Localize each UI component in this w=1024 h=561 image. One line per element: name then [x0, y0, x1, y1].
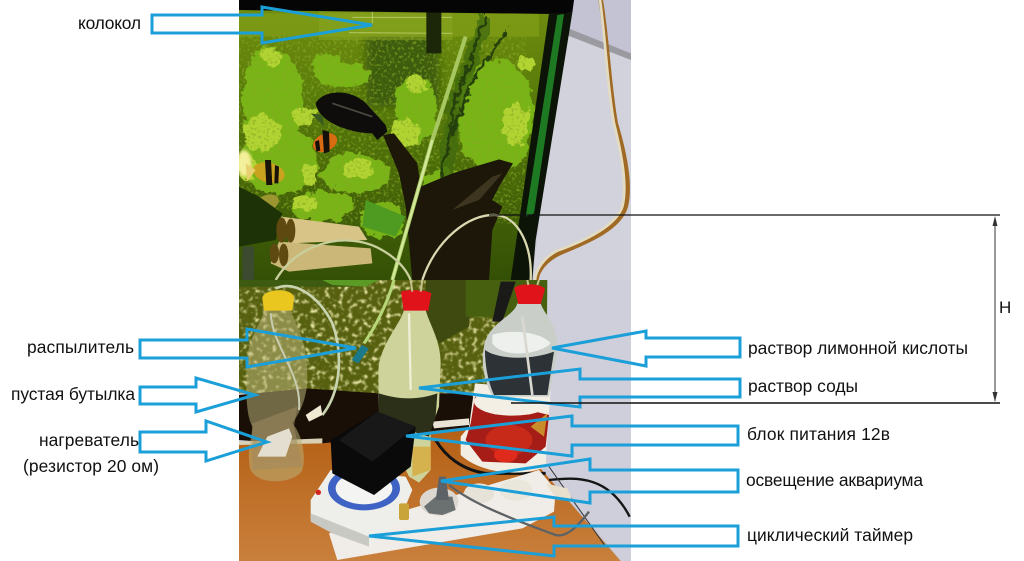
aquarium upper part	[237, 0, 631, 280]
label: нагреватель: нагреватель	[39, 430, 139, 450]
label: резистор: (резистор 20 ом)	[23, 456, 159, 476]
hoses to bottles	[422, 215, 531, 280]
height dimension H: H	[999, 298, 1011, 317]
white shelf edge	[432, 418, 469, 428]
driftwood	[383, 133, 513, 280]
arrow: раствор лимонной кислоты	[552, 331, 740, 366]
citric bottle	[483, 280, 557, 397]
label: циклический таймер: циклический таймер	[747, 525, 913, 545]
label: распылитель: распылитель	[27, 337, 134, 357]
fish: black	[311, 92, 387, 140]
thermometer strip	[492, 282, 516, 322]
arrow: нагреватель	[140, 421, 267, 461]
dark band	[239, 388, 479, 447]
jar with cherries	[461, 383, 551, 473]
plant texture	[239, 37, 526, 223]
shadow lower left	[239, 187, 282, 247]
air tube	[392, 37, 466, 280]
photo: aquarium setup	[237, 0, 631, 561]
left bottle	[246, 290, 307, 481]
wall upper	[564, 0, 631, 58]
table	[239, 427, 621, 561]
soda bottle	[378, 280, 441, 483]
height dimension H	[489, 215, 1011, 403]
power strip	[329, 470, 589, 560]
wall hose	[536, 0, 628, 280]
bell glass	[349, 8, 452, 33]
power cable	[436, 440, 546, 473]
power supply	[331, 412, 416, 495]
label: раствор лимонной кислоты: раствор лимонной кислоты	[748, 338, 968, 358]
lower part	[239, 280, 631, 561]
water	[239, 10, 552, 280]
label: пустая бутылка: пустая бутылка	[11, 384, 135, 404]
dark hanging plant	[442, 17, 487, 190]
arrow: колокол	[152, 7, 372, 43]
vinyl hose left	[276, 286, 339, 415]
arrow: распылитель	[140, 329, 356, 367]
sprayer	[352, 345, 369, 363]
wall	[547, 280, 549, 318]
arrow: пустая бутылка	[140, 378, 255, 412]
tiger barbs	[246, 130, 337, 208]
plants	[239, 47, 534, 238]
ceramic cave tubes	[270, 217, 372, 272]
arrow: раствор соды	[419, 369, 740, 407]
gravel bed	[239, 280, 506, 394]
label: колокол: колокол	[78, 13, 141, 33]
label: блок питания: блок питания 12в	[747, 424, 890, 444]
frame	[239, 0, 574, 14]
arrow: освещение аквариума	[441, 459, 738, 503]
air tube bottom	[364, 280, 394, 343]
heater resistor	[257, 428, 292, 457]
label: раствор соды: раствор соды	[748, 376, 858, 396]
arrow: циклический таймер	[369, 517, 738, 556]
timer	[311, 466, 412, 547]
label: освещение аквариума: освещение аквариума	[746, 470, 923, 490]
arrow: блок питания	[406, 416, 738, 456]
